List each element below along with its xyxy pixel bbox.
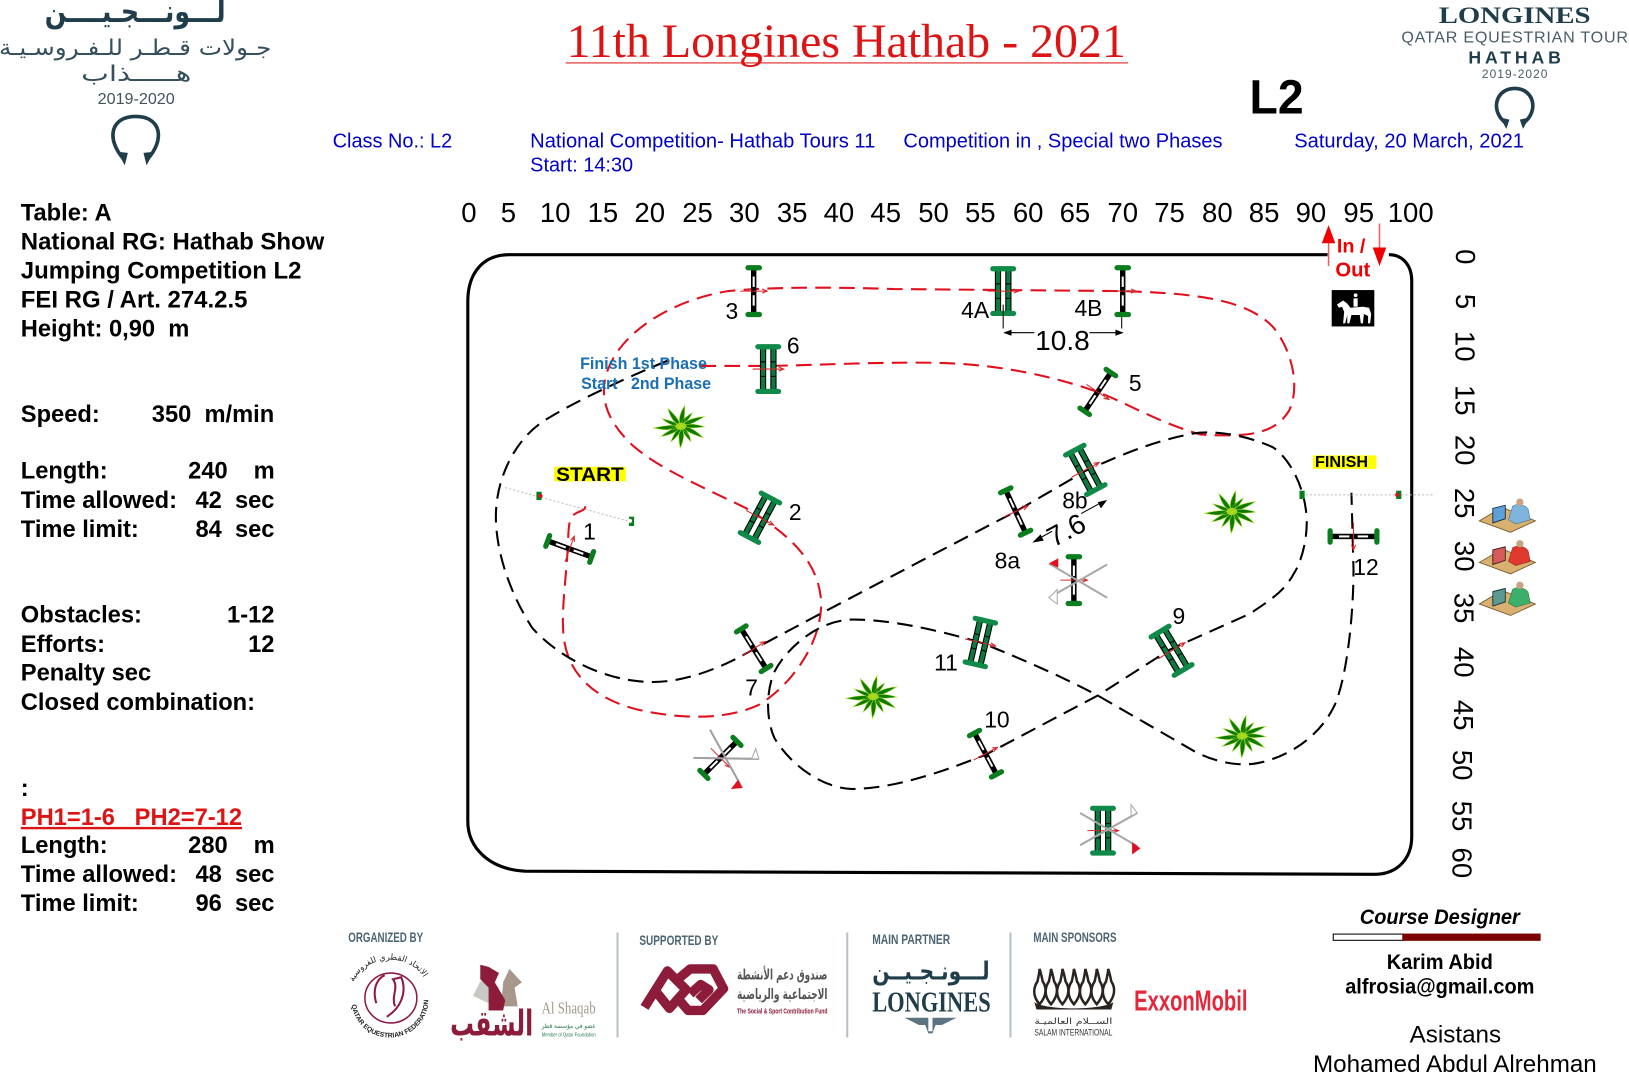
top distance ruler: 35 [777,197,807,228]
event details line: Start: 14:30 [530,155,633,177]
panel: class information: Jumping Competition L2 [21,259,301,285]
top distance ruler: 25 [682,197,713,228]
logo: Qatar Equestrian Federation: QATAR EQUESTRIAN FEDERATION [351,1000,428,1038]
top distance ruler [461,197,1434,228]
obstacle 10 [961,724,1010,783]
assistant designer [1313,1022,1597,1078]
finish label: FINISH [1315,454,1368,471]
event details line [333,131,1524,177]
panel: class information: m [254,459,275,485]
sponsor: supported by: الاجتماعية والرياضية [737,986,827,1003]
plant [653,405,705,448]
top distance ruler: 70 [1107,197,1138,228]
obstacle 12 [1328,523,1380,550]
top distance ruler: 45 [870,197,901,228]
top distance ruler: 50 [918,197,949,228]
right distance ruler: 60 [1446,848,1477,878]
judge green [1479,582,1535,615]
logo: Longines Qatar tour Arabic: 2019-2020 [98,90,175,108]
top distance ruler: 75 [1154,197,1185,228]
removed obstacle centre [1049,554,1107,606]
logo: Salam International [1034,969,1114,1037]
removed obstacle left [692,730,759,789]
panel: class information: Time limit: [21,891,139,917]
top distance ruler: 60 [1013,197,1043,228]
panel: class information: 48 [195,862,222,888]
panel: class information: Closed combination: [21,690,255,716]
sponsor: main partner: LONGINES [872,988,991,1019]
judge blue [1479,498,1535,532]
icon: winged hourglass [904,1018,956,1033]
panel: class information: sec [235,517,274,543]
top distance ruler: 40 [824,197,854,228]
panel: class information: m [254,833,275,859]
logo: social and sport fund [645,969,724,1010]
obstacle 9 [1145,621,1198,680]
course designer: Course Designer [1360,906,1522,929]
sponsor: supported by: SUPPORTED BY [639,933,718,948]
panel: class information: Speed: [21,402,100,428]
right distance ruler: 45 [1448,700,1479,731]
top distance ruler: 85 [1249,197,1279,228]
sponsor: supported by [639,933,827,1016]
event details line: Competition in , Special two Phases [903,131,1223,153]
panel: class information: 240 [188,459,228,485]
obstacle numbers: 12 [1353,554,1379,580]
finish line [1299,491,1433,499]
right distance ruler: 25 [1449,488,1480,518]
obstacle 1 [541,527,599,571]
top distance ruler: 0 [461,197,477,228]
right distance ruler: 5 [1450,294,1481,309]
plant [1215,715,1267,758]
right distance ruler: 0 [1450,249,1481,264]
panel: class information: 96 [195,891,222,917]
course designer: alfrosia@gmail.com [1345,975,1534,998]
obstacle numbers: 11 [934,650,958,676]
panel: class information: National RG: Hathab Show [21,230,325,256]
obstacle numbers: 8a [995,548,1020,574]
obstacle numbers: 1 [583,519,596,545]
obstacle 8a [992,482,1039,541]
panel: class information: Table: A [21,200,112,226]
obstacle numbers: 4B [1074,295,1102,321]
panel: class information: 84 [195,517,223,543]
top distance ruler: 15 [588,197,618,228]
logo: Longines Qatar tour English: QATAR EQUESTRIAN TOUR [1401,29,1628,47]
judges icons [1479,498,1535,615]
panel: class information: sec [235,862,274,888]
black route: phase two [496,361,1354,789]
plant [846,675,898,719]
logo: Longines Qatar tour English [1401,3,1628,129]
panel: class information: Length: [21,833,108,859]
judge red [1479,540,1535,574]
logo: Al Shaqab [450,965,596,1044]
top distance ruler: 65 [1060,197,1090,228]
phase change label: Start 2nd Phase [581,374,711,393]
sponsor: main sponsors [1033,930,1247,1037]
right distance ruler: 35 [1448,593,1479,623]
obstacle 2 [734,488,785,547]
panel: class information: Penalty sec [21,660,151,686]
logo: Longines Qatar tour English: LONGINES [1439,3,1591,28]
obstacle numbers: 10 [984,707,1010,733]
obstacle 3 [740,265,767,317]
plant [1204,490,1256,534]
obstacle 8b [1060,441,1111,499]
course designer [1333,906,1541,998]
obstacle 6 [753,344,784,394]
logo: Longines Qatar tour Arabic: جـولات قـطـر للـفـروسـيـة [0,36,271,61]
in and out gate [1322,224,1386,282]
panel: class information: Efforts: [21,632,105,658]
logo: Al Shaqab: عضو في مؤسسة قطر [541,1023,596,1030]
top distance ruler: 95 [1343,197,1374,228]
logo: Al Shaqab: الشقب [450,1003,533,1044]
logo: Longines Qatar tour Arabic [0,0,271,165]
panel: class information: 12 [248,632,274,658]
panel: class information: PH1=1-6 PH2=7-12 [21,805,242,831]
top distance ruler: 10 [540,197,570,228]
logo: Qatar Equestrian Federation: الاتحاد القطري للفروسية [350,953,428,982]
panel: class information: 1-12 [227,603,274,629]
in and out gate: Out [1335,260,1370,282]
sponsor dividers [618,933,1010,1038]
logo: Al Shaqab: Al Shaqab [542,999,596,1018]
panel: class information: Height: 0,90 m [21,316,189,342]
panel: class information: sec [235,891,274,917]
panel: class information: 42 [195,488,222,514]
right distance ruler: 20 [1449,435,1480,465]
obstacle numbers: 7 [745,674,758,700]
class code L2: L2 [1250,71,1304,124]
panel: class information: Length: [21,459,108,485]
top distance ruler: 5 [501,197,516,228]
sponsor: main partner: MAIN PARTNER [872,932,950,947]
sponsor: supported by: صندوق دعم الأنشطة [737,965,827,983]
sponsor: main partner: لـــونـجـيــن [872,956,990,986]
top distance ruler: 55 [965,197,996,228]
logo: Longines Qatar tour English: 2019-2020 [1482,67,1548,81]
right distance ruler [1446,249,1481,878]
obstacle numbers: 4A [961,297,990,323]
panel: class information: Time allowed: [21,862,177,888]
removed obstacle bottom [1080,805,1140,856]
logo: Salam International: SALAM INTERNATIONAL [1034,1027,1112,1037]
right distance ruler: 55 [1446,801,1477,831]
assistant designer: Asistans [1410,1022,1501,1049]
obstacle 7 [728,620,779,678]
panel: class information: Obstacles: [21,603,142,629]
logo: Salam International: الســلام العالميـة [1034,1016,1112,1026]
sponsor: main sponsors: MAIN SPONSORS [1033,930,1116,945]
sponsor: organized by: ORGANIZED BY [348,930,423,945]
right distance ruler: 30 [1449,541,1480,572]
logo: ExxonMobil: ExxonMobil [1134,985,1247,1017]
start line [505,488,634,526]
event details line: National Competition- Hathab Tours 11 [530,131,875,153]
sponsor: organized by [348,930,596,1044]
panel: class information: Time limit: [21,517,139,543]
icon: horse and rider entry sign [1332,290,1374,326]
distance 10.8 between 4A and 4B [1003,305,1124,356]
red route: phase one [563,288,1294,717]
obstacle numbers: 9 [1173,603,1185,629]
distance 7.6 between 8a and 8b [1032,500,1107,553]
sponsor: main partner [872,932,991,1033]
panel: class information: 350 m/min [152,402,274,428]
obstacle 4B [1109,265,1136,317]
obstacle numbers [583,295,1379,733]
panel: class information: 280 [188,833,228,859]
top distance ruler: 80 [1202,197,1233,228]
right distance ruler: 10 [1449,331,1480,362]
panel: class information: Time allowed: [21,488,177,514]
distance 10.8 between 4A and 4B: 10.8 [1035,325,1090,356]
logo: Longines Qatar tour Arabic: هـــــذاب [81,62,191,87]
title: 11th Longines Hathab - 2021 [567,15,1126,68]
logo: Qatar Equestrian Federation [350,953,428,1038]
event details line: Saturday, 20 March, 2021 [1294,131,1524,153]
top distance ruler: 90 [1296,197,1326,228]
panel: class information: FEI RG / Art. 274.2.5 [21,288,247,314]
panel: class information: : [21,776,29,802]
logo: Al Shaqab: Member of Qatar Foundation [542,1032,596,1038]
panel: class information [21,200,325,917]
obstacle numbers: 3 [725,298,738,324]
obstacle 5 [1072,363,1124,421]
distance 7.6 between 8a and 8b: 7.6 [1042,507,1091,553]
obstacle 11 [960,615,1001,670]
top distance ruler: 20 [634,197,665,228]
obstacle numbers: 5 [1129,370,1142,396]
right distance ruler: 50 [1447,750,1478,780]
course designer: Karim Abid [1387,951,1493,974]
phase change label [580,354,711,393]
plants [653,405,1267,758]
obstacle 4A [988,266,1019,316]
event details line: Class No.: L2 [333,131,452,153]
assistant designer: Mohamed Abdul Alrehman [1313,1051,1597,1078]
start label: START [556,465,624,486]
phase change label: Finish 1st Phase [580,354,707,373]
top distance ruler: 100 [1388,197,1434,228]
arena boundary [468,255,1412,874]
logo: Longines Qatar tour English: HATHAB [1468,47,1561,67]
right distance ruler: 40 [1448,647,1479,678]
in and out gate: In / [1337,236,1366,258]
panel: class information: sec [235,488,274,514]
obstacles [541,265,1380,783]
top distance ruler: 30 [729,197,760,228]
right distance ruler: 15 [1449,385,1480,416]
obstacle numbers: 8b [1062,487,1088,513]
obstacle numbers: 2 [789,499,802,525]
sponsor: supported by: The Social & Sport Contribution Fund [737,1007,827,1016]
obstacle numbers: 6 [787,332,800,358]
